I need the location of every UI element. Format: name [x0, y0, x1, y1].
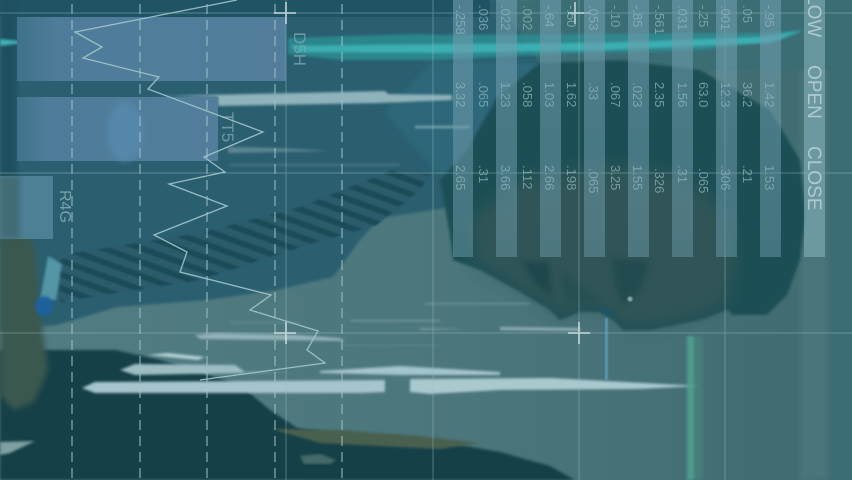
table row: LOW values: [453, 5, 777, 35]
line chart: [75, 0, 325, 380]
table row: OPEN values: .33: [586, 82, 601, 100]
left dark edge: [0, 0, 17, 240]
horizontal bar chart: [0, 17, 309, 239]
head silhouette: [440, 60, 806, 330]
dark lower-left desk: [0, 350, 575, 480]
brown hair foreground: [272, 429, 480, 449]
table row: LOW values: -.10: [608, 5, 623, 27]
mouth, nose and ear shadows: [522, 258, 650, 306]
table row: LOW values: -.50: [564, 5, 579, 27]
table row: OPEN values: .065: [476, 82, 491, 107]
table row: OPEN values: 1.42: [762, 82, 777, 107]
table row: CLOSE values: 2.66: [542, 165, 557, 190]
table row: CLOSE values: .21: [740, 165, 755, 183]
table row: LOW values: .036: [476, 5, 491, 30]
table row: OPEN values: .023: [630, 82, 645, 107]
hand highlight: [300, 454, 336, 464]
table row: CLOSE values: 3.25: [608, 165, 623, 190]
table row: CLOSE values: .065: [696, 168, 711, 193]
table headers: LOW OPEN CLOSE: CLOSE: [803, 146, 824, 210]
table row: CLOSE values: .198: [564, 165, 579, 190]
table row: CLOSE values: .326: [652, 168, 667, 193]
table row: CLOSE values: 1.55: [630, 165, 645, 190]
table row: CLOSE values: .065: [586, 168, 601, 193]
table row: LOW values: .001: [718, 5, 733, 30]
table row: OPEN values: 1.56: [675, 82, 690, 107]
bar: TT5: [17, 97, 237, 162]
crosshair markers: [274, 2, 590, 344]
table row: CLOSE values: .31: [675, 165, 690, 183]
table row: OPEN values: 2.35: [652, 82, 667, 107]
table row: CLOSE values: 2.65: [453, 165, 468, 190]
table row: OPEN values: 1.23: [498, 82, 513, 107]
cyan data streak: [0, 30, 806, 60]
table row: CLOSE values: .31: [476, 165, 491, 183]
bar: R4G: [0, 176, 73, 239]
table row: CLOSE values: 1.53: [762, 165, 777, 190]
table row: LOW values: -.25: [696, 5, 711, 27]
earring highlight: [600, 296, 632, 316]
top dark strip: [0, 0, 490, 17]
table row: OPEN values: .067: [608, 82, 623, 107]
table row: CLOSE values: .112: [520, 165, 535, 189]
table row: LOW values: .05: [740, 5, 755, 23]
blue vertical marker: [605, 318, 608, 380]
table row: OPEN values: 3.32: [453, 82, 468, 107]
collar edge: [385, 62, 540, 176]
bar: R4G: R4G: [56, 190, 73, 223]
shirt and jacket: [0, 0, 540, 330]
left foreground sleeve accent: [40, 256, 62, 300]
green vertical marker: [687, 336, 703, 480]
data table columns: [453, 0, 825, 257]
table row: LOW values: .002: [520, 5, 535, 30]
table row: OPEN values: [453, 82, 777, 107]
dashed vertical grid lines: [72, 4, 342, 480]
table row: LOW values: .031: [675, 5, 690, 30]
table row: CLOSE values: 3.66: [498, 165, 513, 190]
table row: OPEN values: 12.3: [718, 82, 733, 107]
table headers: LOW OPEN CLOSE: OPEN: [803, 65, 824, 119]
table row: LOW values: .022: [498, 5, 513, 30]
table row: LOW values: -.95: [762, 5, 777, 27]
table headers: LOW OPEN CLOSE: [803, 0, 824, 210]
left foreground person: [0, 178, 48, 410]
white data streaks: [82, 91, 700, 394]
bar: TT5: TT5: [218, 112, 237, 142]
striped tie: [57, 167, 430, 302]
table row: OPEN values: 1.03: [542, 82, 557, 107]
table row: OPEN values: .058: [520, 82, 535, 107]
pale vertical band: [800, 60, 828, 480]
table row: LOW values: .053: [586, 5, 601, 30]
table row: OPEN values: 63.0: [696, 82, 711, 107]
table row: OPEN values: 1.62: [564, 82, 579, 107]
bar: D5H: [17, 17, 309, 81]
table row: LOW values: -.85: [630, 5, 645, 27]
table row: LOW values: -.64: [542, 5, 557, 27]
table row: LOW values: -.561: [652, 5, 667, 35]
table row: CLOSE values: .306: [718, 165, 733, 190]
top right wall: [490, 0, 852, 480]
table row: OPEN values: 36.2: [740, 82, 755, 107]
bar: D5H: D5H: [290, 32, 309, 66]
face skin tone: [470, 165, 735, 327]
table row: CLOSE values: [453, 165, 777, 193]
table row: LOW values: -.258: [453, 5, 468, 35]
